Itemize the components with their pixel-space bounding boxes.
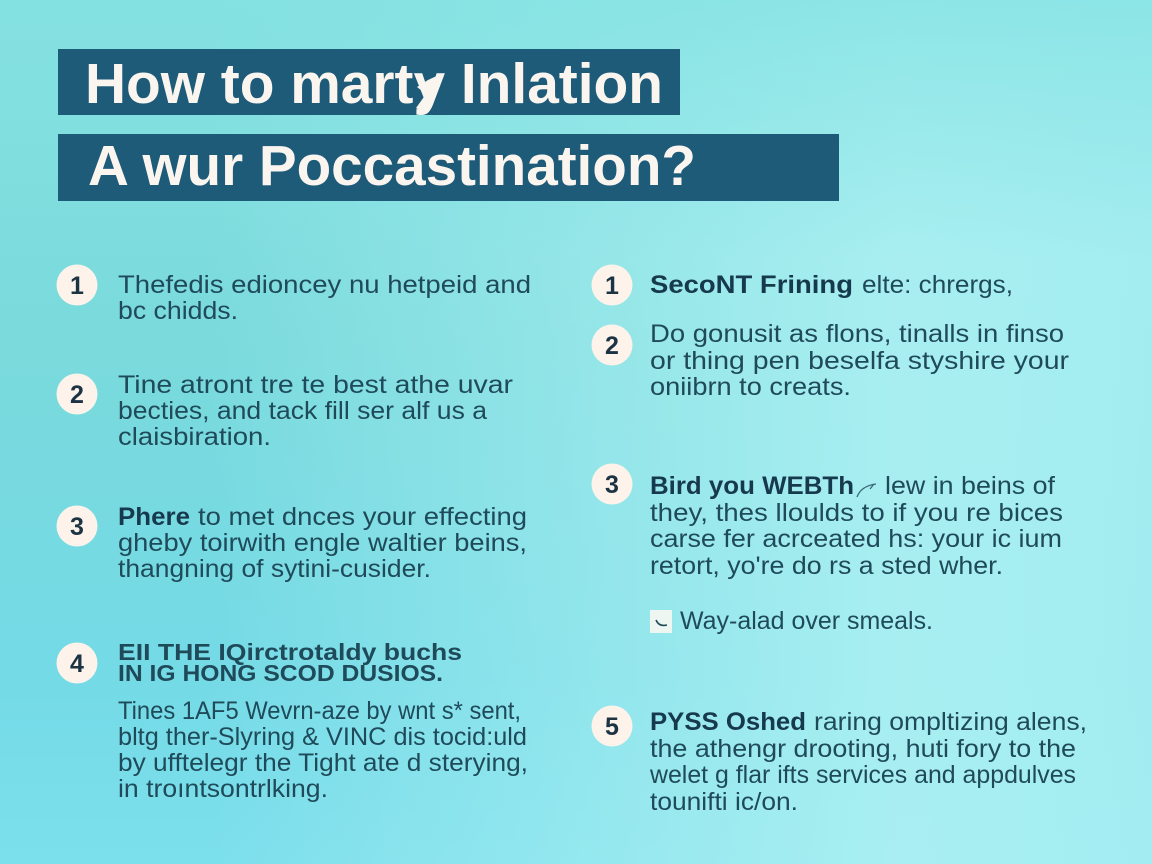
title line 2: A wur Poccastination? <box>88 134 696 198</box>
left item 3 <box>56 503 527 583</box>
right item 1 text: elte: chrergs, <box>862 271 1013 299</box>
left item 3 text: Phere <box>118 503 190 531</box>
right item 2 text <box>650 320 1069 401</box>
left item 1 text <box>118 271 531 325</box>
left item 1 <box>56 264 531 325</box>
badge 2 <box>56 374 98 414</box>
right item 2 text: Do gonusit as flons, tinalls in finso <box>650 320 1064 348</box>
checklist note <box>650 607 933 635</box>
left item 4 text: bltg ther-Slyring & VINC dis tocid:uld <box>118 723 527 751</box>
left item 1 text: bc chidds. <box>118 297 238 325</box>
note text: Way-alad over smeals. <box>680 607 933 635</box>
right item 5 text: raring ompltizing alens, <box>814 708 1087 736</box>
left item 2 text: becties, and tack fill ser alf us a <box>118 397 487 425</box>
left item 3 text: to met dnces your effecting <box>198 503 527 531</box>
right item 3 text: Bird you WEBTh <box>650 472 854 500</box>
right item 5 text: the athengr drooting, huti fory to the <box>650 735 1076 763</box>
badge 3: 3 <box>605 471 619 499</box>
right item 5 <box>592 706 1087 816</box>
icon: check box <box>650 610 672 633</box>
left item 2 <box>56 371 513 451</box>
right item 3 text: lew in beins of <box>885 472 1055 500</box>
right item 3 text: retort, yo're do rs a sted wher. <box>650 552 1003 580</box>
right item 5 text <box>649 708 1087 816</box>
left item 4 <box>56 639 528 803</box>
left item 2 text: claisbiration. <box>118 423 271 451</box>
left item 1 text: Thefedis edioncey nu hetpeid and <box>118 271 531 299</box>
right item 1 text: SecoNT Frining <box>650 271 853 299</box>
left item 3 text <box>118 503 527 583</box>
left item 4 text: in troıntsontrlking. <box>118 775 328 803</box>
left item 4 heading <box>118 639 462 686</box>
badge 5: 5 <box>605 713 619 741</box>
badge 1 <box>592 264 632 306</box>
right item 5 text: welet g flar ifts services and appdulves <box>649 761 1076 789</box>
right item 3 text <box>650 472 1063 580</box>
right item 2 <box>592 320 1069 401</box>
badge 2 <box>592 324 632 366</box>
right item 3 text: carse fer acrceated hs: your ic ium <box>650 525 1062 553</box>
right column <box>592 264 1087 816</box>
left item 4 text: by ufftelegr the Tight ate d sterying, <box>118 749 528 777</box>
badge 1: 1 <box>605 272 619 300</box>
right item 1 <box>592 264 1013 306</box>
badge 2: 2 <box>70 381 84 409</box>
left item 3 text: gheby toirwith engle waltier beins, <box>118 529 527 557</box>
right item 2 text: oniibrn to creats. <box>650 373 851 401</box>
badge 3: 3 <box>70 513 84 541</box>
right item 5 text: PYSS Oshed <box>650 708 806 736</box>
right item 2 text: or thing pen beselfa styshire your <box>650 347 1069 375</box>
right item 3 text: they, thes lloulds to if you re bices <box>650 499 1063 527</box>
left column <box>56 264 531 803</box>
left item 4 heading: EII THE IQirctrotaldy buchs <box>118 639 462 665</box>
left item 4 heading: IN IG HONG SCOD DUSIOS. <box>118 660 443 686</box>
badge 3 <box>56 506 98 546</box>
right item 3 <box>592 464 1063 580</box>
left item 4 text: Tines 1AF5 Wevrn-aze by wnt s* sent, <box>118 697 521 725</box>
badge 5 <box>592 706 632 746</box>
badge 2: 2 <box>605 332 619 360</box>
badge 1: 1 <box>70 272 84 300</box>
badge 4: 4 <box>70 650 84 678</box>
right item 5 text: tounifti ic/on. <box>650 788 798 816</box>
left item 2 text <box>118 371 513 451</box>
title block <box>58 49 839 201</box>
left item 3 text: thangning of sytini-cusider. <box>118 555 431 583</box>
title line 1: How to marty Inlation <box>85 52 663 116</box>
left item 4 text <box>118 697 528 803</box>
right item 1 text <box>650 271 1013 299</box>
badge 3 <box>592 464 632 504</box>
badge 1 <box>56 264 98 306</box>
badge 4 <box>56 642 98 684</box>
left item 2 text: Tine atront tre te best athe uvar <box>118 371 513 399</box>
